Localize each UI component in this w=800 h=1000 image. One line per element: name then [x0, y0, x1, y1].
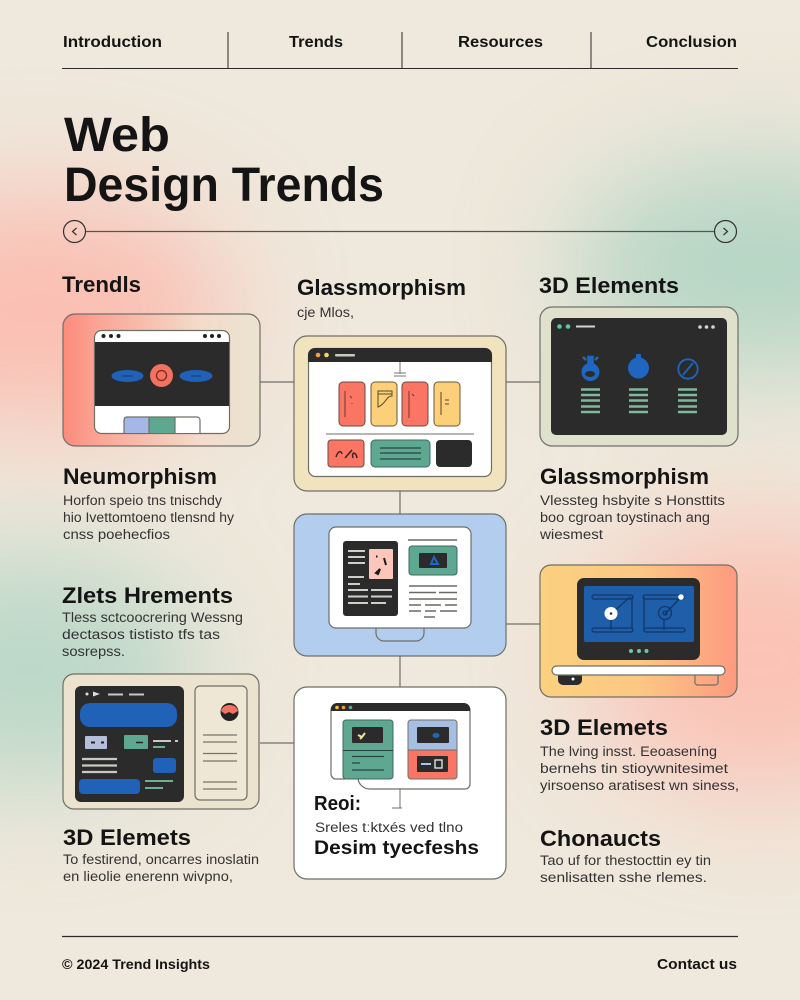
- text: Chonaucts: [540, 826, 711, 885]
- panel: card with window illustration and text: Reoi:: [314, 793, 361, 815]
- navigation bar: Introduction: [63, 34, 162, 51]
- heading: Glassmorphism centre: cje Mlos,: [297, 305, 354, 320]
- text: Glassmorphism right: [539, 464, 725, 542]
- text: Zlets Hrements: dectasos tististo tfs tas: [62, 627, 220, 642]
- text: Zlets Hrements: Tless sctcoocrering Wessng: [62, 610, 243, 625]
- window illustration: [331, 703, 470, 808]
- text: 3D Elemets left: en lieolie enerenn wivpno,: [63, 869, 233, 884]
- panel: card with window illustration and text: [294, 687, 506, 879]
- text: Neumorphism: Neumorphism: [63, 464, 217, 489]
- text: Zlets Hrements: [62, 583, 243, 659]
- heading: Trends: Trendls: [62, 272, 141, 297]
- footer: [62, 936, 738, 973]
- text: Neumorphism: [63, 464, 234, 542]
- text: Chonaucts: senlisatten sshe rlemes.: [540, 870, 707, 885]
- panel: blue article illustration: [294, 514, 506, 656]
- text: 3D Elemets right: 3D Elemets: [540, 715, 668, 740]
- connector lines: [260, 382, 540, 743]
- text: Neumorphism: hio Ivettomtoeno tlensnd hy: [63, 510, 234, 525]
- panel: central dashboard illustration: [294, 336, 506, 491]
- navigation bar: Conclusion: [646, 34, 737, 51]
- text: 3D Elemets left: 3D Elemets: [63, 825, 191, 850]
- footer: Contact us: [657, 956, 737, 973]
- panel: card with window illustration and text: Desim tyecfeshs: [314, 838, 479, 859]
- icon: dial: [678, 359, 698, 379]
- heading: Glassmorphism centre: Glassmorphism: [297, 275, 466, 300]
- title: [64, 109, 384, 212]
- heading: Glassmorphism centre: [297, 275, 466, 320]
- panel: dark 3D elements illustration: [540, 307, 738, 446]
- panel: neumorphism illustration: [63, 314, 260, 446]
- icon: flask: [582, 357, 600, 381]
- panel: laptop illustration: [540, 565, 737, 697]
- navigation bar: Trends: [289, 34, 343, 51]
- text: 3D Elemets right: [540, 715, 739, 793]
- timeline slider with arrows: [64, 220, 736, 242]
- icon: orb: [628, 354, 649, 378]
- footer: © 2024 Trend Insights: [62, 956, 210, 972]
- title: Design Trends: [64, 159, 384, 212]
- text: 3D Elemets left: [63, 825, 259, 884]
- text: Neumorphism: Horfon speio tns tnischdy: [63, 493, 222, 508]
- text: Neumorphism: cnss poehecfios: [63, 527, 170, 542]
- text: Glassmorphism right: Glassmorphism: [540, 464, 709, 489]
- title: Web: [64, 109, 170, 162]
- text: Chonaucts: Chonaucts: [540, 826, 661, 851]
- text: 3D Elemets right: yirsoenso aratisest wn siness,: [540, 778, 739, 793]
- text: Glassmorphism right: Vlessteg hsbyite s Honsttits: [540, 493, 725, 508]
- panel: card with window illustration and text: Sreles tːktxés ved tlno: [315, 820, 463, 835]
- text: Chonaucts: Tao uf for thestocttin ey tin: [540, 853, 711, 868]
- text: Glassmorphism right: wiesmest: [539, 527, 603, 542]
- heading: 3D Elements: 3D Elements: [539, 273, 679, 298]
- text: Zlets Hrements: Zlets Hrements: [62, 583, 233, 608]
- navigation bar: [62, 32, 738, 69]
- text: Glassmorphism right: boo cgroan toystinach ang: [540, 510, 710, 525]
- panel: sidebar app illustration: [63, 674, 259, 809]
- text: Zlets Hrements: sosrepss.: [62, 644, 125, 659]
- text: 3D Elemets right: The lving insst. Eeoaseníng: [540, 744, 717, 759]
- text: 3D Elemets left: To festirend, oncarres inoslatin: [63, 852, 259, 867]
- navigation bar: Resources: [458, 34, 543, 51]
- text: 3D Elemets right: bernehs tin stioywnitesimet: [540, 761, 728, 776]
